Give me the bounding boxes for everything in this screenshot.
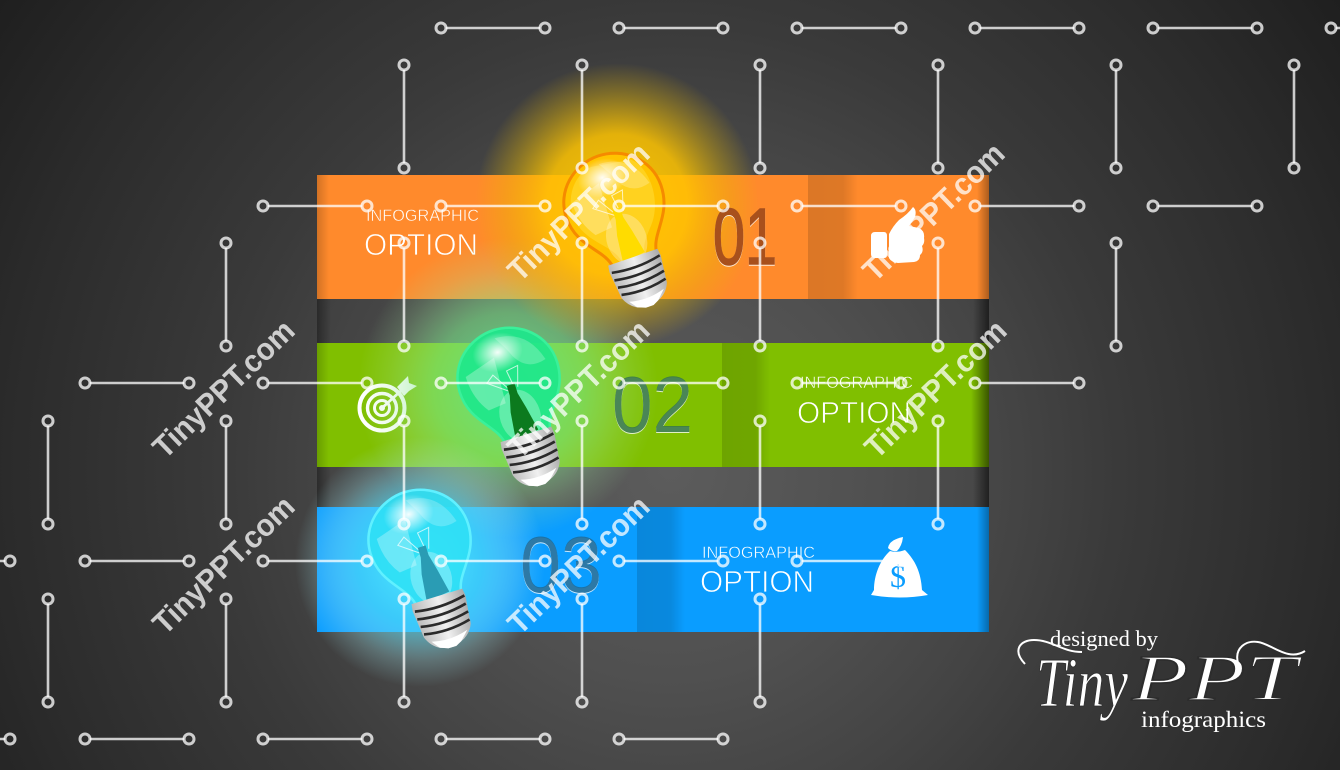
logo: designed by TinyPPT infographics: designed by (1050, 626, 1158, 651)
glow: green (358, 238, 658, 538)
option 3 label: INFOGRAPHIC (702, 543, 815, 562)
option 1 label: INFOGRAPHIC (366, 206, 479, 225)
watermarks: TinyPPT.com (856, 136, 1012, 288)
icon: money bag: $ (890, 558, 906, 594)
icon: green light bulb (445, 315, 590, 500)
number 01: 01 (713, 192, 777, 281)
panel: option 1 orange bar (317, 175, 989, 299)
number 03: 03 (520, 520, 602, 609)
watermarks: TinyPPT.com (146, 313, 302, 465)
panel: option 2 green bar (317, 343, 989, 467)
watermarks: TinyPPT.com (146, 489, 302, 641)
option 2 title: OPTION (797, 395, 911, 430)
icon: yellow light bulb (551, 140, 697, 323)
watermarks (146, 136, 1014, 641)
watermarks: TinyPPT.com (501, 489, 657, 641)
option 1 title: OPTION (364, 227, 478, 262)
icon: target with arrow (360, 376, 417, 430)
option 3 title: OPTION (700, 564, 814, 599)
logo: designed by TinyPPT infographics: Tiny (1036, 645, 1129, 722)
panel: option 3 blue bar (317, 507, 989, 632)
icon: thumbs up (871, 207, 924, 263)
number 02: 02 (612, 360, 693, 449)
glow: yellow (475, 63, 759, 347)
watermarks: TinyPPT.com (501, 313, 657, 465)
icon: blue light bulb (356, 477, 501, 662)
glow: blue (295, 437, 545, 687)
watermarks: TinyPPT.com (858, 313, 1014, 465)
panel: ribbon shadows (317, 299, 989, 507)
icon: money bag (871, 537, 928, 598)
watermarks: TinyPPT.com (501, 136, 657, 288)
logo: designed by TinyPPT infographics (1018, 626, 1305, 732)
logo: designed by TinyPPT infographics: infographics (1141, 707, 1266, 732)
option 2 label: INFOGRAPHIC (800, 373, 913, 392)
logo: designed by TinyPPT infographics: PPT (1131, 642, 1303, 715)
